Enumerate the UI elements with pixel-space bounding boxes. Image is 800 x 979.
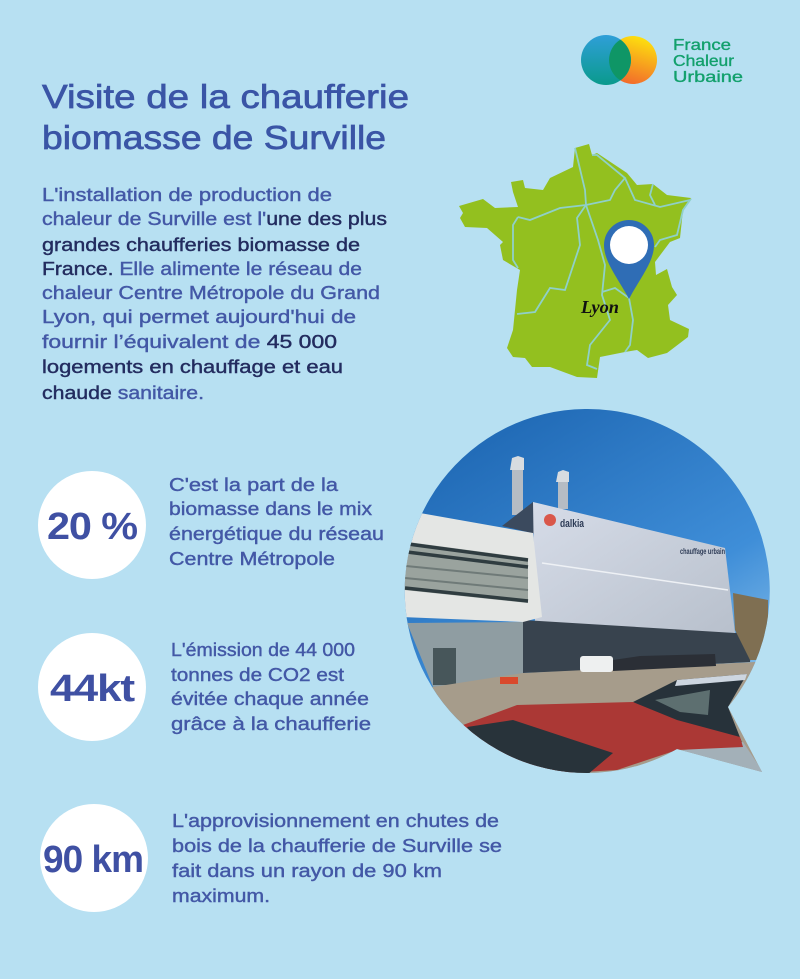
stat: 44kt xyxy=(38,633,371,741)
photo: chimneys xyxy=(510,456,569,515)
intro text block: grandes chaufferies biomasse de xyxy=(42,235,360,255)
stat: 20 %: énergétique du réseau xyxy=(169,524,384,544)
stat: 44kt: évitée chaque année xyxy=(171,689,369,709)
stat: 90 km: 90 km xyxy=(43,839,143,881)
stat: 90 km: fait dans un rayon de 90 km xyxy=(172,861,442,881)
intro text block: chaleur de Surville est l' une des plus xyxy=(42,209,387,229)
intro text block xyxy=(42,185,387,403)
stat: 44kt: 44kt xyxy=(50,668,136,710)
map: region borders xyxy=(513,148,690,369)
map: land outline xyxy=(459,144,691,378)
stat: 20 % xyxy=(38,471,384,579)
stat: 44kt: grâce à la chaufferie xyxy=(171,714,371,734)
intro text block: fournir l’équivalent de 45 000 xyxy=(42,332,337,352)
map of France xyxy=(459,144,691,378)
photo: boiler building xyxy=(502,502,768,673)
stat: 90 km: bois de la chaufferie de Surville se xyxy=(172,836,502,856)
stat: 90 km xyxy=(40,804,502,912)
stat circle 20 % xyxy=(38,471,146,579)
photo: boiler building: chauffage urbain xyxy=(680,547,725,556)
title: Visite de la chaufferie xyxy=(42,78,409,115)
stat circle 44kt xyxy=(38,633,146,741)
photo: boiler building: dalkia xyxy=(560,518,585,530)
photo: office wing xyxy=(403,512,542,687)
stat: 90 km: L'approvisionnement en chutes de xyxy=(172,811,499,831)
logo: France Chaleur Urbaine: Chaleur xyxy=(673,53,735,70)
stat: 20 %: biomasse dans le mix xyxy=(169,499,372,519)
intro text block: France. Elle alimente le réseau de xyxy=(42,259,362,279)
stat: 44kt: L'émission de 44 000 xyxy=(171,640,355,660)
stat: 20 %: 20 % xyxy=(47,506,137,548)
stat: 20 %: C'est la part de la xyxy=(169,475,339,495)
stat: 44kt: tonnes de CO2 est xyxy=(171,665,344,685)
photo in speech bubble xyxy=(400,405,770,780)
stat: 90 km: maximum. xyxy=(172,886,270,906)
photo: ground and vehicles xyxy=(432,654,762,773)
intro text block: Lyon, qui permet aujourd'hui de xyxy=(42,307,356,327)
stat: 20 %: Centre Métropole xyxy=(169,549,335,569)
stat circle 90 km xyxy=(40,804,148,912)
logo: France Chaleur Urbaine xyxy=(581,35,743,86)
logo: France Chaleur Urbaine: Urbaine xyxy=(673,69,743,86)
map: label Lyon: Lyon xyxy=(580,297,619,317)
map: location pin xyxy=(604,220,654,299)
intro text block: L'installation de production de xyxy=(42,185,332,205)
title: biomasse de Surville xyxy=(42,119,386,156)
intro text block: chaleur Centre Métropole du Grand xyxy=(42,283,380,303)
intro text block: logements en chauffage et eau xyxy=(42,357,343,377)
title xyxy=(42,78,409,156)
intro text block: chaude sanitaire. xyxy=(42,383,204,403)
logo: France Chaleur Urbaine: France xyxy=(673,37,731,54)
